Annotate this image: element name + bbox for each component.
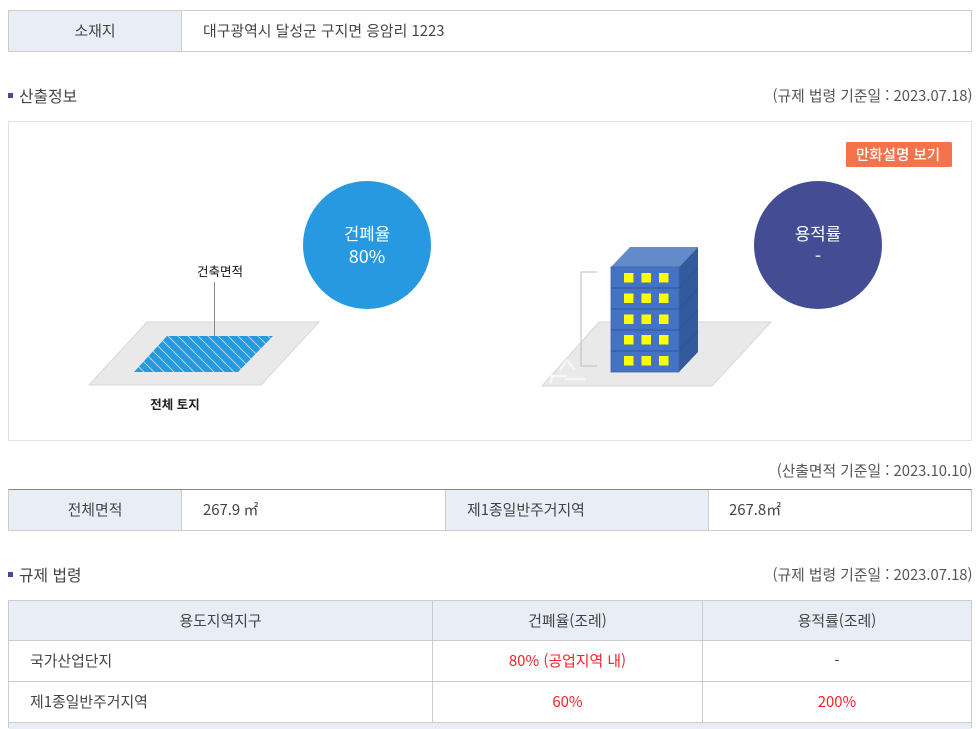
zone area value: 267.8㎡ <box>729 499 781 520</box>
total area label: 전체면적 <box>68 499 122 520</box>
floor area ratio circle: 용적률 <box>795 221 841 245</box>
location label: 소재지 <box>74 20 116 41</box>
panel: diagrams <box>8 121 972 441</box>
regulation table <box>8 600 972 728</box>
land <box>542 322 771 386</box>
zone label <box>445 490 709 530</box>
area table <box>8 489 972 531</box>
watermark <box>550 360 585 384</box>
diagrams drawing <box>88 142 952 410</box>
comic explanation button <box>846 142 952 167</box>
location address: 대구광역시 달성군 구지면 응암리 1223 <box>203 20 445 41</box>
location table <box>8 10 972 52</box>
hatched building area <box>134 336 273 372</box>
total area label <box>9 490 182 530</box>
header: zoning <box>9 601 432 640</box>
calculated area reference date: (산출면적 기준일 : 2023.10.10) <box>777 460 972 481</box>
row 1 coverage: 80% (공업지역 내) <box>509 650 626 671</box>
row 1 coverage <box>432 641 702 681</box>
location label <box>9 11 182 51</box>
total area value: 267.9 ㎡ <box>203 499 258 520</box>
heading: regulations: 규제 법령 <box>19 563 82 586</box>
header: floor area: 용적률(조례) <box>798 610 876 631</box>
floor area ratio circle <box>754 181 882 309</box>
windows <box>624 273 668 366</box>
row 2 floor area: 200% <box>818 691 856 712</box>
building coverage ratio circle: 80% <box>349 243 385 269</box>
header: coverage: 건폐율(조례) <box>528 610 607 631</box>
row 2 zone: 제1종일반주거지역 <box>30 691 148 712</box>
leader line <box>214 282 216 336</box>
regulation reference date: (규제 법령 기준일 : 2023.07.18) <box>773 85 972 106</box>
building <box>611 247 698 372</box>
header: coverage <box>432 601 702 640</box>
row 1 floor area: - <box>834 650 840 671</box>
zone label: 제1종일반주거지역 <box>467 499 585 520</box>
floor area ratio circle: - <box>815 243 821 269</box>
building area label: 건축면적 <box>197 261 243 280</box>
floor area diagram <box>542 247 771 386</box>
row 2 coverage: 60% <box>552 691 583 712</box>
row 2 floor area <box>702 682 971 722</box>
row 2 coverage <box>432 682 702 722</box>
header: floor area <box>702 601 971 640</box>
whole land <box>89 322 319 385</box>
building coverage ratio circle <box>303 181 431 309</box>
regulation reference date: (규제 법령 기준일 : 2023.07.18) <box>773 564 972 585</box>
row 1 floor area <box>702 641 971 681</box>
heading: calculation info: 산출정보 <box>19 84 77 107</box>
row 1 zone: 국가산업단지 <box>30 650 112 671</box>
header: zoning: 용도지역지구 <box>179 610 262 631</box>
building coverage diagram <box>89 261 319 413</box>
height bracket <box>581 272 597 366</box>
next row background <box>9 723 971 729</box>
building coverage ratio circle: 건폐율 <box>344 221 390 245</box>
whole land label: 전체 토지 <box>150 394 200 413</box>
comic explanation button: 만화설명 보기 <box>856 144 940 165</box>
